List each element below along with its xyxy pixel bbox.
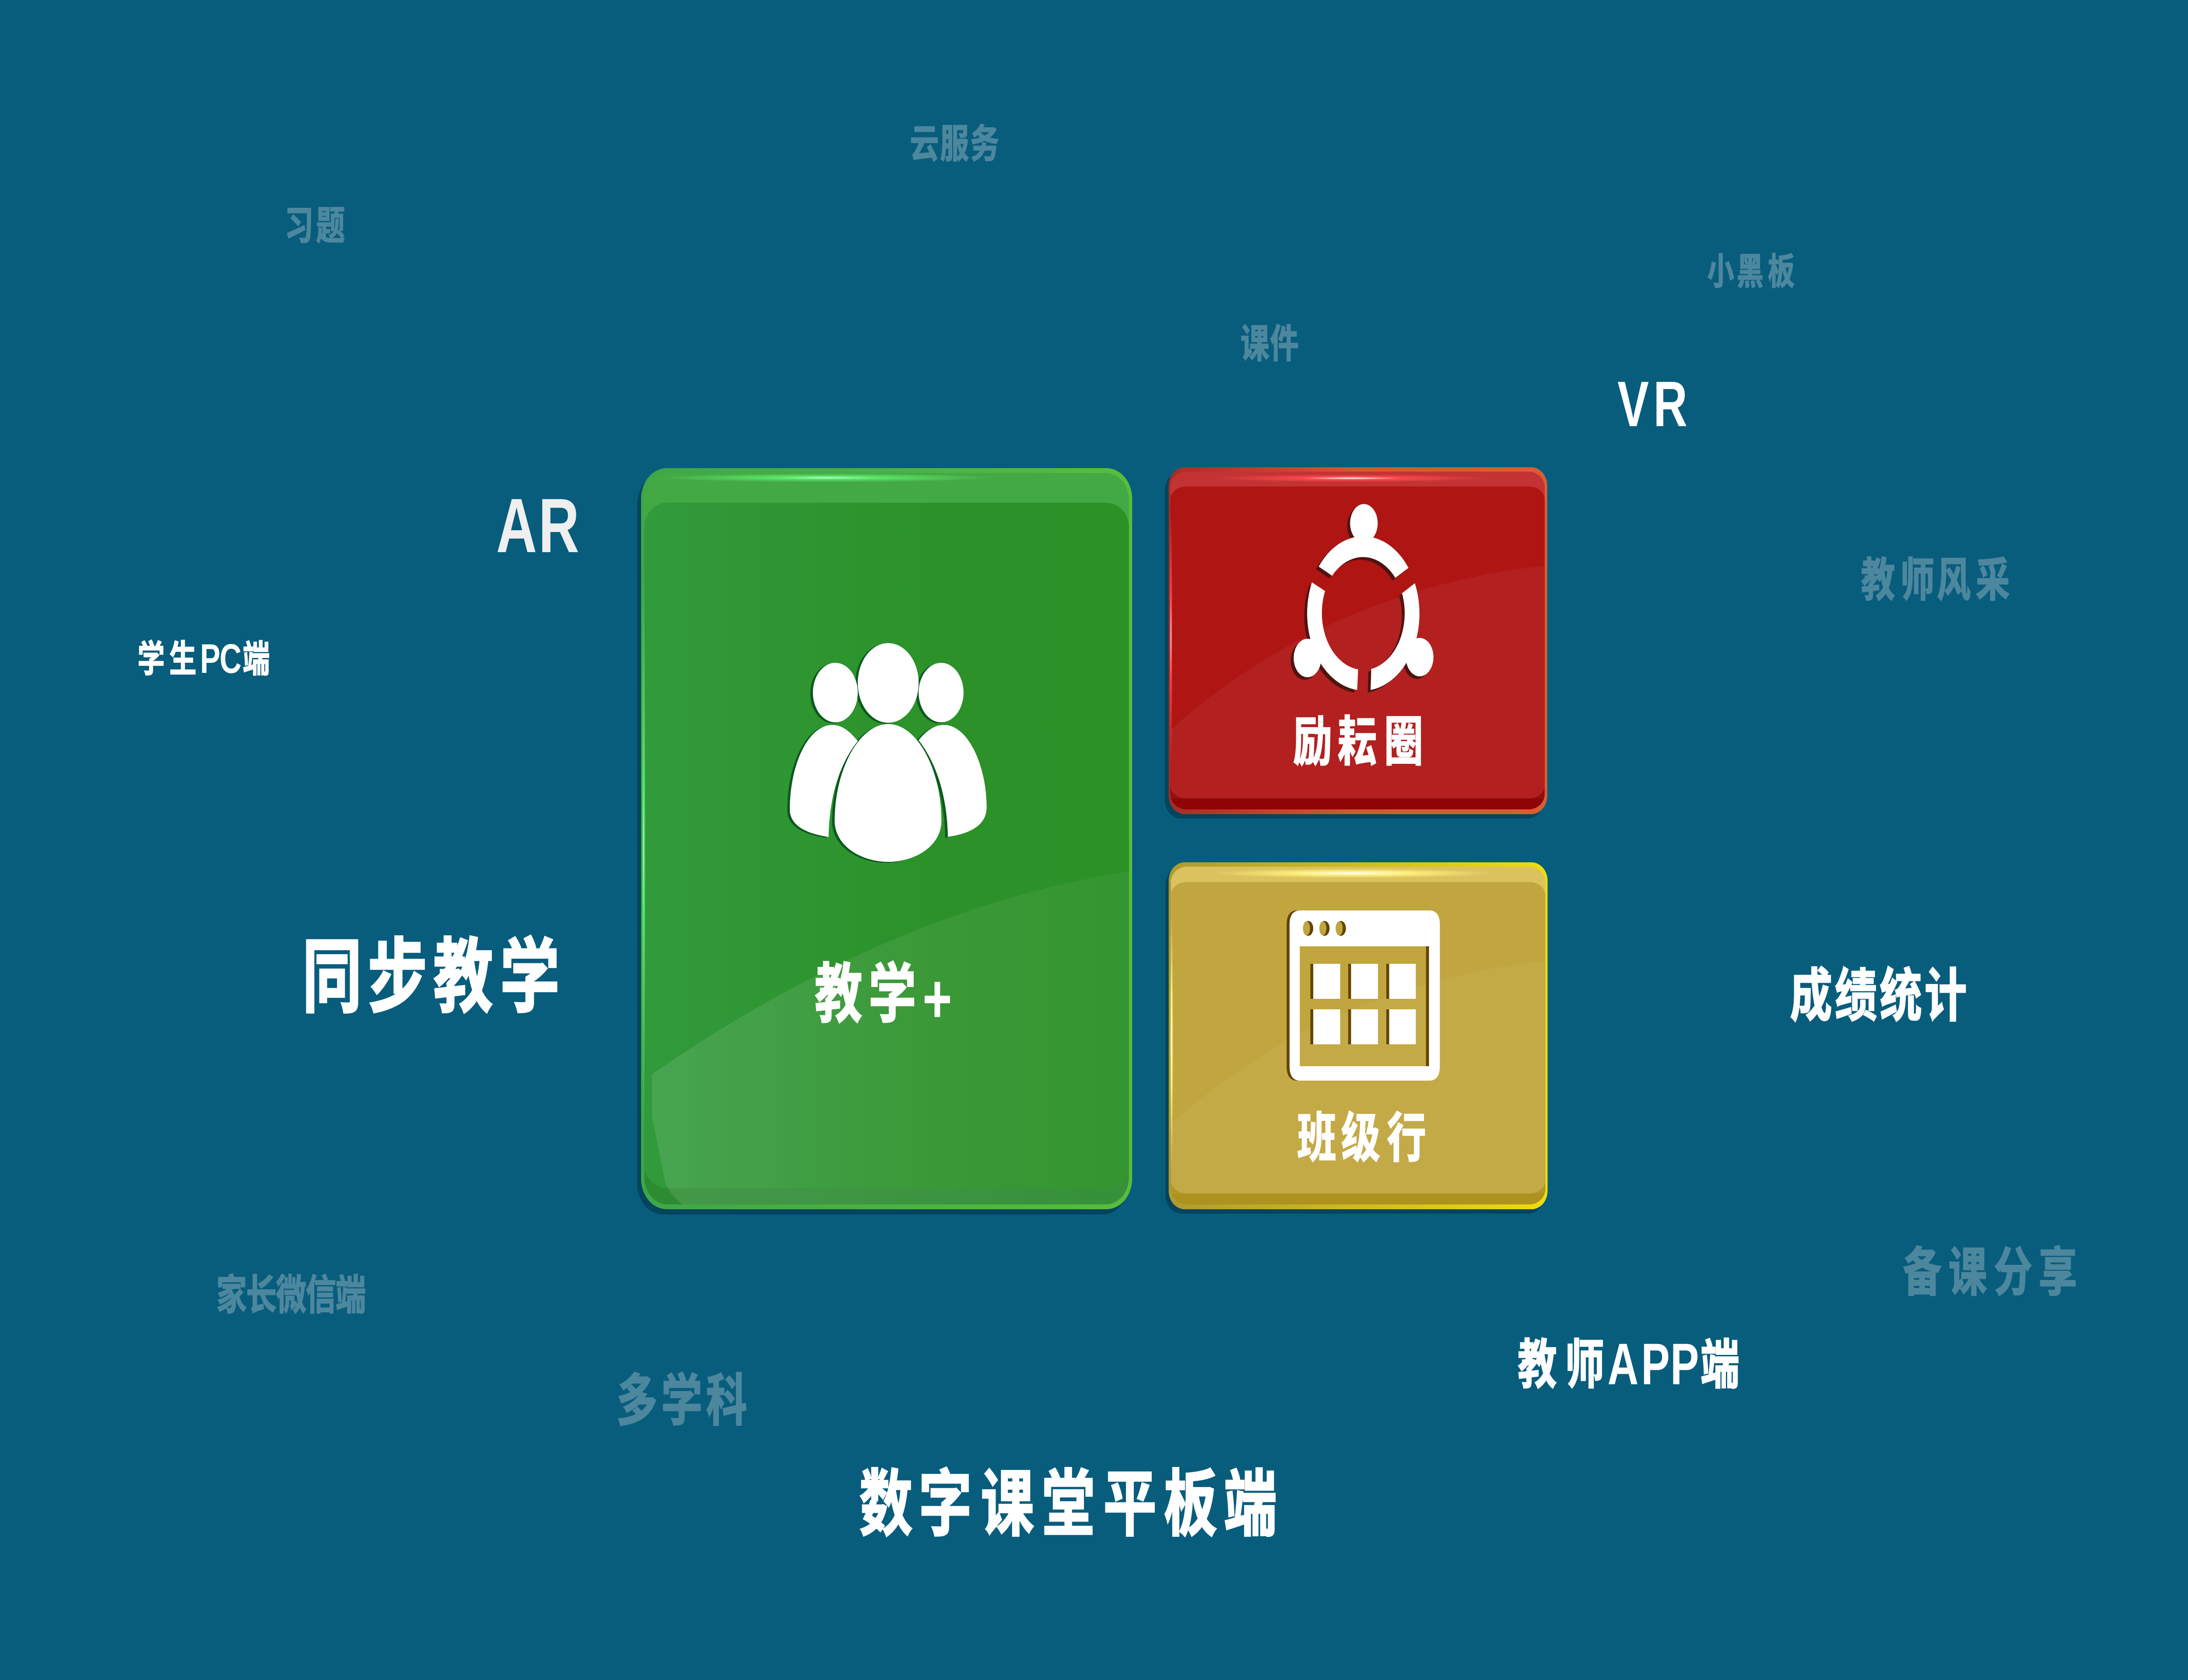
keyword: 教师APP端: 端 (1701, 1335, 1739, 1395)
icon: three-person circle (1291, 504, 1434, 693)
label: 教学+: + (922, 961, 952, 1037)
muted keyword: 习题: 习题 (284, 204, 345, 248)
keyword: 教师APP端: APP (1607, 1331, 1699, 1397)
keyword: 同步教学: 同步教学 (302, 931, 560, 1023)
muted keyword: 教师风采: 教师风采 (1861, 554, 2010, 606)
keyword: 学生PC端: PC (200, 635, 242, 682)
card body green (637, 468, 1132, 1214)
infographic canvas (138, 123, 2076, 1537)
card body yellow (1165, 862, 1547, 1214)
muted keyword: 小黑板: 小黑板 (1707, 251, 1795, 292)
muted keyword: 云服务: 云服务 (910, 122, 999, 166)
keyword: VR: VR (1617, 368, 1687, 440)
keyword: AR: AR (496, 482, 579, 569)
title: 数字课堂平板端: 数字课堂平板端 (859, 1463, 1277, 1545)
icon: class table window (1287, 910, 1440, 1081)
keyword: 学生PC端: 学生 (137, 639, 196, 680)
panel: 励耘圈 red card (1165, 467, 1547, 819)
label: 教学+: 教学 (815, 959, 916, 1031)
panel: 教学+ green card (637, 468, 1132, 1214)
muted keyword: 备课分享: 备课分享 (1903, 1244, 2077, 1302)
card body red (1165, 467, 1547, 819)
icon: group of people (787, 643, 987, 863)
panel: 班级行 yellow card (1165, 862, 1547, 1214)
label: 励耘圈: 励耘圈 (1293, 712, 1423, 772)
keyword: 教师APP端: 教师 (1518, 1335, 1604, 1395)
muted keyword: 家长微信端: 家长微信端 (216, 1272, 366, 1319)
keyword: 学生PC端: 端 (242, 639, 270, 680)
muted keyword: 多学科: 多学科 (617, 1369, 747, 1432)
muted keyword: 课件: 课件 (1241, 322, 1299, 366)
keyword: 成绩统计: 成绩统计 (1790, 963, 1967, 1029)
label: 班级行: 班级行 (1297, 1108, 1426, 1168)
